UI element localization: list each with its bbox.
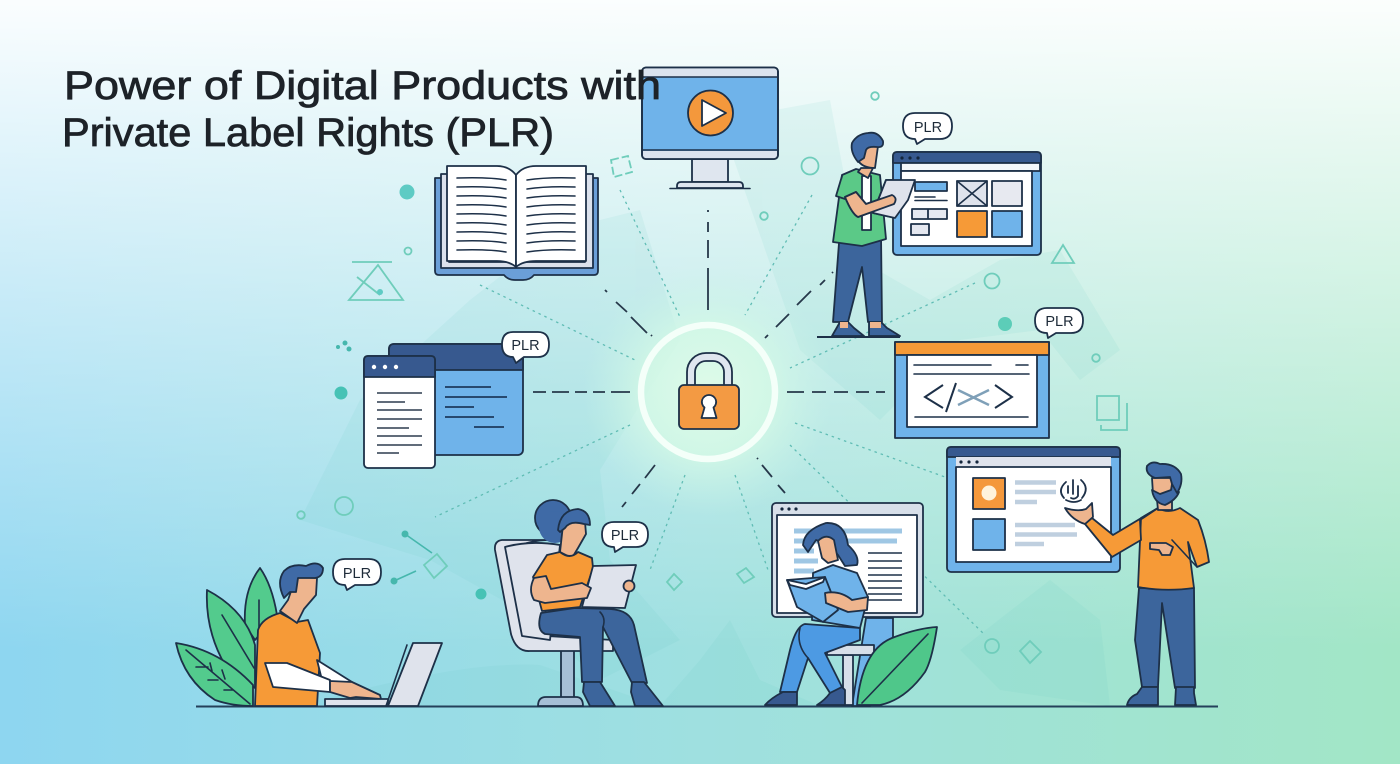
speech bubble: PLR laptop <box>333 559 381 590</box>
sweater <box>1138 508 1209 590</box>
speech bubble: PLR right <box>1035 308 1083 338</box>
person: man with paper <box>832 133 915 336</box>
speech bubble: PLR laptop: PLR <box>343 566 371 582</box>
speech bubble: PLR top: PLR <box>914 120 942 136</box>
plant: leaf by woman <box>857 627 937 705</box>
head <box>1152 478 1176 501</box>
icon: touch swirl <box>1061 480 1086 502</box>
shoes <box>583 682 663 706</box>
background screen <box>772 503 923 617</box>
hands and arm <box>531 576 591 603</box>
trousers <box>539 608 647 683</box>
hand on paper <box>845 192 896 217</box>
neck and face <box>560 519 586 558</box>
head <box>280 577 317 623</box>
chair <box>561 650 574 700</box>
dashed connector lines <box>533 210 885 507</box>
speech bubble: PLR chair: PLR <box>611 528 639 544</box>
ground line <box>196 706 1218 708</box>
title: Power of Digital Products with <box>64 64 661 108</box>
trousers <box>1135 588 1195 688</box>
icon: overlapping document windows <box>364 344 523 468</box>
browser window: code <box>895 342 1049 438</box>
speech bubble: PLR top <box>903 113 952 144</box>
torso <box>533 552 593 611</box>
person: man at laptop <box>255 563 442 706</box>
speech bubble: PLR left <box>502 332 549 363</box>
title: Private Label Rights (PLR) <box>62 111 554 155</box>
head <box>859 142 878 168</box>
redraw of paper over window <box>873 180 915 218</box>
title <box>62 64 661 155</box>
hair <box>535 500 571 536</box>
hair <box>803 523 858 566</box>
central padlock with glowing ring <box>641 325 775 459</box>
tablet <box>582 565 636 608</box>
central glow <box>583 267 833 517</box>
icon: open book <box>435 166 598 280</box>
person: woman in chair with tablet <box>495 500 663 706</box>
decorative shapes <box>297 92 1127 663</box>
shirt <box>812 565 868 628</box>
trousers <box>780 624 860 693</box>
speech bubble: PLR left: PLR <box>511 338 540 354</box>
arms <box>317 660 352 690</box>
laptop <box>325 699 388 706</box>
speech bubble: PLR chair <box>602 522 648 552</box>
person: woman with book at screen <box>765 503 923 706</box>
dotted connector lines <box>435 190 985 635</box>
book <box>787 577 838 622</box>
paper and arm <box>873 180 915 218</box>
chair back and stool <box>852 618 893 706</box>
speech bubble: PLR right: PLR <box>1045 314 1074 330</box>
icon: video monitor <box>642 68 778 188</box>
browser window: wireframe layout <box>893 152 1041 255</box>
shirt <box>255 613 320 706</box>
legs <box>833 230 882 322</box>
arm <box>825 592 868 612</box>
faint world map shapes <box>300 100 1120 706</box>
person: presenter <box>1065 462 1209 705</box>
plant: leaves by laptop <box>176 568 277 706</box>
browser window: presentation <box>947 447 1120 572</box>
shirt <box>833 169 886 246</box>
floor under man <box>817 336 900 338</box>
